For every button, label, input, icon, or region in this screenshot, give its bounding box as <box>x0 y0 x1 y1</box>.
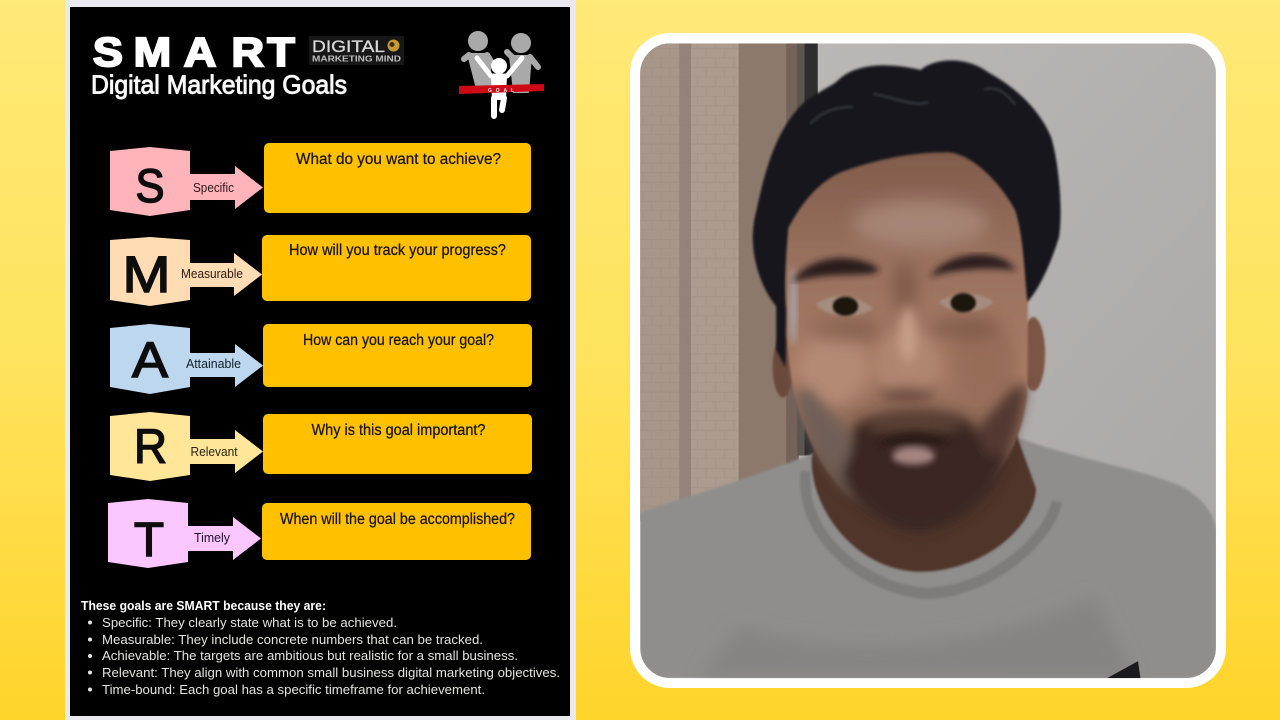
arrow: Relevant: Relevant <box>190 444 238 459</box>
logo: Digital Marketing Mind: DIGITAL <box>312 37 385 56</box>
arrow: Measurable <box>181 253 262 296</box>
question box <box>263 414 532 474</box>
arrow: Specific: Specific <box>193 180 234 195</box>
question box <box>262 235 531 301</box>
collar <box>805 471 1057 593</box>
hexagon: T <box>108 499 188 568</box>
arrow: Timely: Timely <box>194 530 230 545</box>
under-eye shading <box>810 263 1000 340</box>
bullet list: Specific: They clearly state what is to be achieved. <box>102 615 397 630</box>
row: Attainable <box>110 324 532 394</box>
hexagon: S <box>110 147 190 216</box>
panel: presenter video frame <box>630 33 1226 688</box>
hexagon: S: S <box>136 159 164 212</box>
shirt logo <box>1107 661 1140 678</box>
bullet list: Achievable: The targets are ambitious but realistic for a small business. <box>102 648 518 663</box>
bullet list: Time-bound: Each goal has a specific timeframe for achievement. <box>102 682 485 697</box>
title: SMART: SMART <box>93 30 295 76</box>
arrow: Attainable: Attainable <box>186 356 241 371</box>
icon: runners crossing the goal line <box>459 32 544 116</box>
bullet list <box>88 615 560 697</box>
question box: How will you track your progress? <box>289 242 506 259</box>
arrow: Attainable <box>186 344 263 387</box>
question box <box>262 503 531 560</box>
shirt <box>640 436 1216 678</box>
hexagon: R <box>110 412 190 481</box>
wall <box>640 43 1216 678</box>
eyes <box>816 293 994 316</box>
mouth <box>877 433 950 465</box>
panel: SMART infographic poster <box>65 0 576 720</box>
row: Specific <box>110 143 531 216</box>
heading: These goals are SMART because they are: <box>81 598 326 613</box>
right cheek shade <box>951 332 1016 390</box>
question box <box>264 143 531 213</box>
hair highlights <box>810 88 1015 124</box>
nose <box>876 306 938 400</box>
question box <box>263 324 532 387</box>
arrow: Specific <box>190 166 263 209</box>
logo: Digital Marketing Mind <box>309 36 404 65</box>
shirt shading <box>707 611 1128 678</box>
face <box>786 150 1029 496</box>
ears <box>1021 317 1045 391</box>
hexagon: A: A <box>132 332 169 388</box>
hexagon: M: M <box>122 246 170 303</box>
hexagon: T: T <box>134 514 164 567</box>
arrow: Measurable: Measurable <box>181 266 243 281</box>
question box: When will the goal be accomplished? <box>280 511 515 528</box>
arrow: Timely <box>188 517 261 560</box>
question box: What do you want to achieve? <box>296 151 501 168</box>
row: Relevant <box>110 412 532 481</box>
hexagon: R: R <box>134 421 167 474</box>
bullet list: Relevant: They align with common small business digital marketing objectives. <box>102 665 560 680</box>
left face edge highlight <box>789 267 797 345</box>
row: Measurable <box>110 235 531 306</box>
window frame <box>797 43 818 456</box>
hexagon: M <box>110 237 190 306</box>
eyebrows <box>796 256 1012 279</box>
left cheek highlight <box>800 328 867 406</box>
question box: How can you reach your goal? <box>303 332 494 349</box>
hair <box>753 60 1061 367</box>
neck <box>812 432 1036 572</box>
row: Timely <box>108 499 531 568</box>
icon: runners crossing the goal line: GOAL <box>488 88 514 94</box>
hexagon: A <box>110 324 190 394</box>
bullet list: Measurable: They include concrete numbers that can be tracked. <box>102 632 483 647</box>
text block: why these goals are SMART <box>81 598 560 697</box>
logo: Digital Marketing Mind: MARKETING MIND <box>312 54 401 64</box>
subtitle: Digital Marketing Goals <box>91 70 347 100</box>
question box: Why is this goal important? <box>312 422 486 439</box>
arrow: Relevant <box>190 430 263 473</box>
beard <box>794 384 1027 532</box>
curtain <box>640 43 799 521</box>
forehead highlight <box>853 200 988 248</box>
